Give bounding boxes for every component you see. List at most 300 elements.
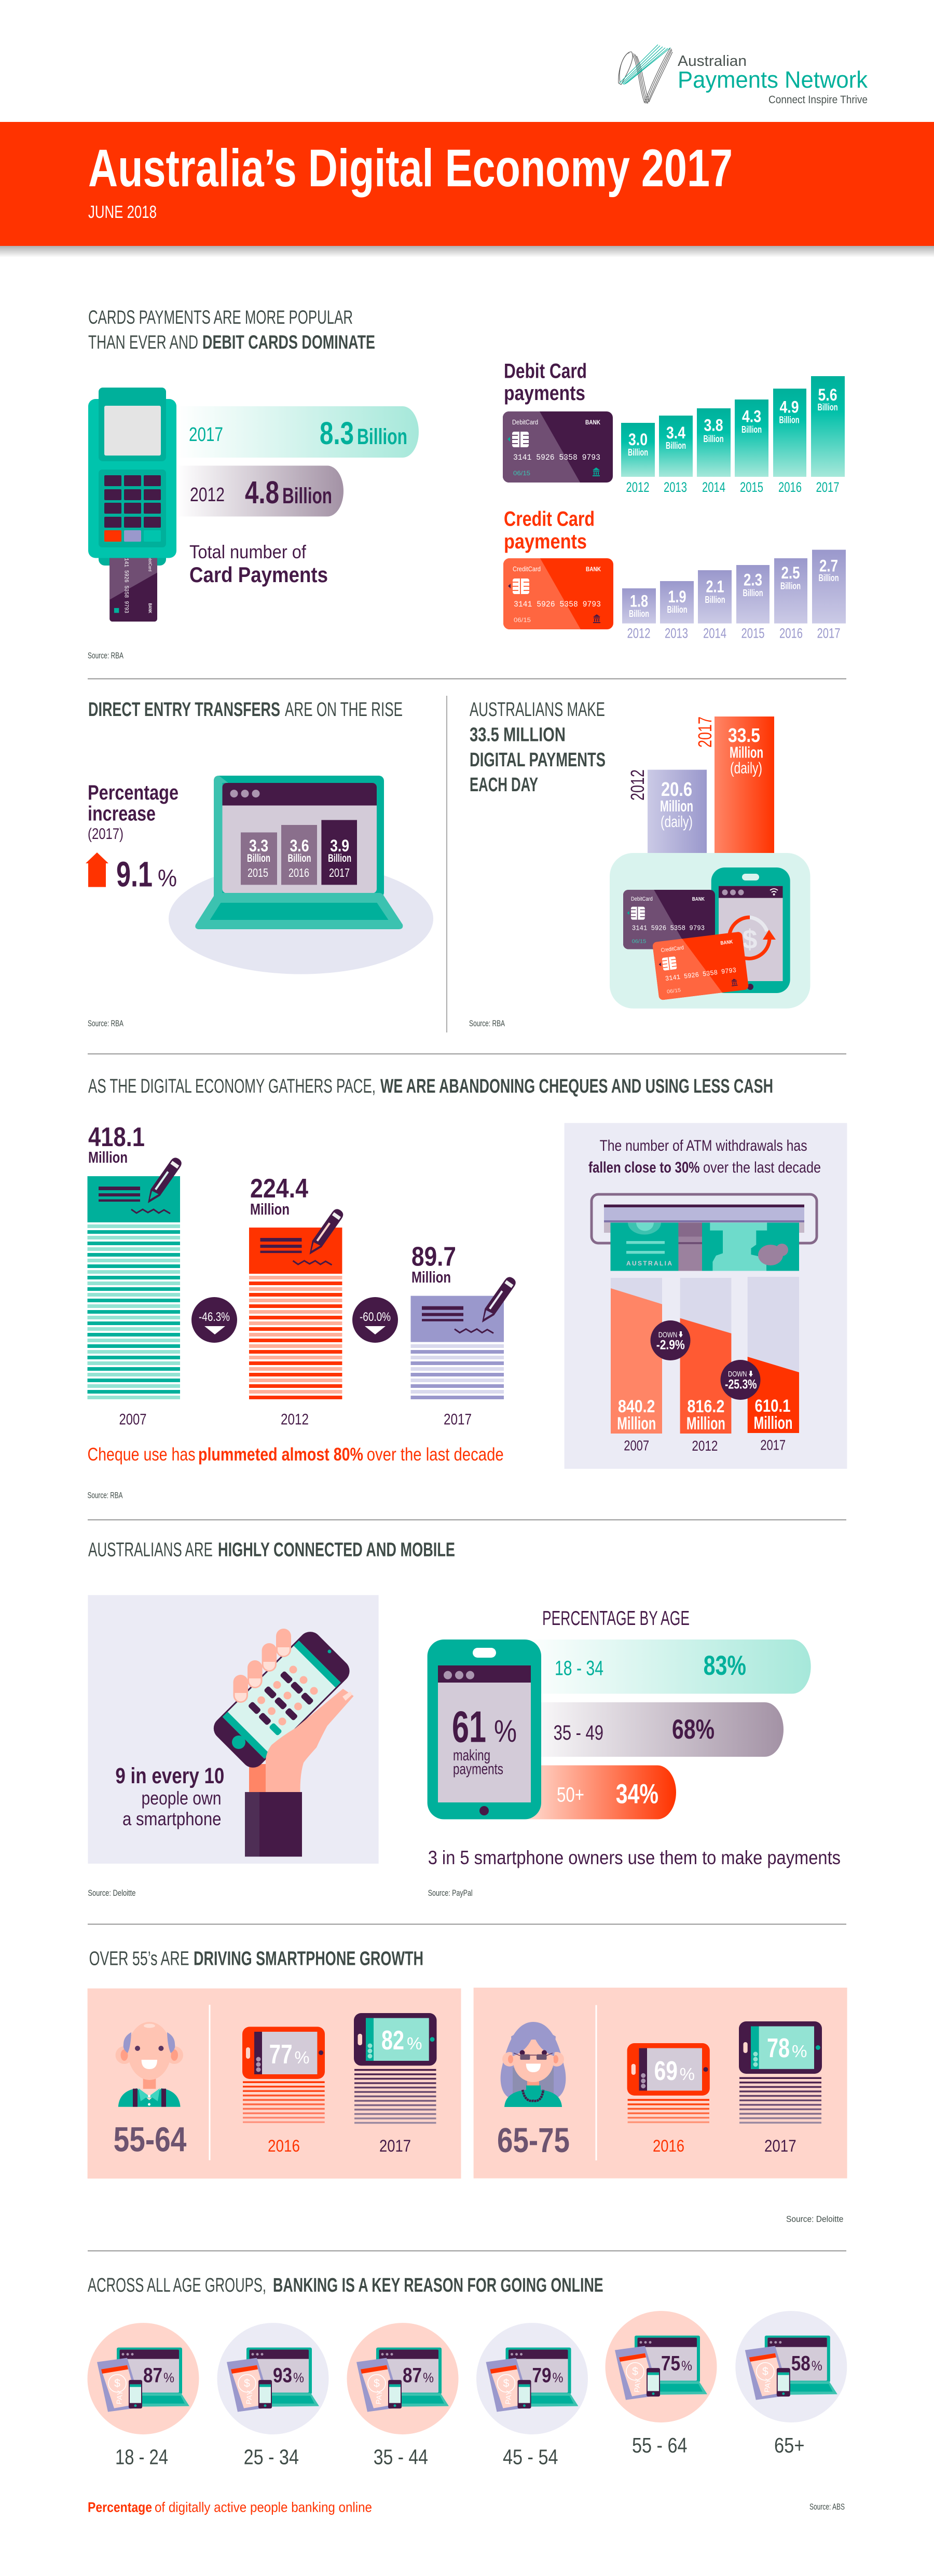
stripes xyxy=(87,1224,180,1399)
heading: digital payments each day xyxy=(470,699,606,796)
icon: pen xyxy=(477,1275,518,1326)
bar: credit 2014 xyxy=(698,570,732,641)
panel: age 55-64 banking xyxy=(605,2311,717,2457)
bar: total card payments 2017 xyxy=(176,406,419,458)
stripes xyxy=(354,2069,436,2124)
source: Source: PayPal xyxy=(428,1888,473,1898)
panel: age 18-24: PAY xyxy=(115,2390,124,2405)
age label: 25 - 34 xyxy=(244,2445,299,2469)
icon: debit card xyxy=(623,890,715,949)
phone: 2016 xyxy=(627,2043,710,2155)
age label: 65+ xyxy=(774,2433,804,2457)
heading: connected and mobile: HIGHLY CONNECTED AND MOBILE xyxy=(218,1539,455,1561)
heading: digital payments each day: DIGITAL PAYMENTS xyxy=(470,749,606,771)
badge: down 2.9 percent: -2.9% xyxy=(656,1338,685,1352)
caption: percentage banking online: of digitally active people banking online xyxy=(155,2499,372,2515)
label: total number of card payments xyxy=(189,541,328,587)
panel: age 55-64 banking: % xyxy=(681,2358,692,2374)
bar: debit 2015 xyxy=(735,400,768,495)
logo mark xyxy=(619,45,672,103)
bar: total card payments 2012: 2012 xyxy=(190,484,225,506)
icon: phone 61 percent: payments xyxy=(453,1761,503,1778)
bar: debit 2013: 2013 xyxy=(664,479,687,495)
bar: debit 2016: Billion xyxy=(779,415,799,425)
panel: age 45-54: PAY xyxy=(504,2390,513,2405)
panel: age 45-54 xyxy=(476,2323,588,2469)
bar chart: debit card payments xyxy=(621,376,845,495)
title: Australia’s Digital Economy 2017 xyxy=(88,139,733,198)
bar: credit 2015: 2.3 xyxy=(744,571,762,589)
text: percentage increase xyxy=(88,781,178,843)
source: Source: RBA xyxy=(88,651,123,660)
phone: 2017: % xyxy=(407,2034,422,2053)
phone: 2016 xyxy=(242,2027,325,2155)
bar: debit 2014: 3.8 xyxy=(704,416,723,435)
age label: 35 - 44 xyxy=(374,2445,428,2469)
icon: credit card xyxy=(503,558,613,629)
bar: total card payments 2012: 4.8 xyxy=(245,475,279,510)
icon: debit card: BANK xyxy=(585,419,600,426)
panel: ATM withdrawals xyxy=(565,1123,847,1469)
panel: age 45-54: 79 xyxy=(532,2364,551,2387)
icon: ATM slot and banknote: AUSTRALIA xyxy=(626,1260,672,1267)
icon: debit card in terminal: BANK xyxy=(147,603,152,613)
source: Source: Deloitte xyxy=(786,2214,843,2224)
callout: smartphone payments: 3 in 5 smartphone owners use them to make payments xyxy=(428,1847,841,1868)
bar: debit 2017: 2017 xyxy=(816,479,840,495)
stat: 9.1 percent: 9.1 xyxy=(116,855,153,894)
logo wordmark: Australian xyxy=(678,53,747,70)
icon: credit card xyxy=(652,931,749,1000)
panel: age 65+: PAY xyxy=(763,2378,772,2393)
text: percentage increase: increase xyxy=(88,802,156,825)
heading: digital payments each day: EACH DAY xyxy=(470,774,538,796)
bar: debit 2016 xyxy=(773,389,806,495)
bar: transfers 2015: Billion xyxy=(247,852,270,864)
bar: daily payments 2017: 33.5 xyxy=(728,725,760,747)
icon: phone 61 percent: 61 xyxy=(452,1703,486,1752)
bar: daily payments 2012: 20.6 xyxy=(661,779,692,801)
bar: transfers 2016: 2016 xyxy=(289,866,309,879)
bar: credit 2013: 1.9 xyxy=(668,587,686,606)
bar: debit 2012 xyxy=(621,423,655,495)
badge: down 2.9 percent xyxy=(651,1320,690,1360)
icon: debit card in terminal xyxy=(109,548,157,622)
icon: debit card: BANK xyxy=(692,897,705,902)
panel: cheque 2012: 224.4 xyxy=(250,1174,308,1204)
icon: phone 61 percent: % xyxy=(494,1714,517,1748)
bar: debit 2013: 3.4 xyxy=(666,423,685,442)
heading: debit card payments xyxy=(504,360,587,405)
stripes xyxy=(411,1344,504,1399)
heading: abandoning cheques: WE ARE ABANDONING CHEQUES AND USING LESS CASH xyxy=(380,1076,773,1097)
panel: cheque 2017 xyxy=(411,1242,518,1428)
panel: age 35-44: $ xyxy=(374,2378,380,2390)
panel: age 18-24: $ xyxy=(114,2378,120,2390)
screen keys xyxy=(257,1665,318,1726)
cuff xyxy=(245,1792,302,1856)
bar: ATM 2007 xyxy=(611,1278,662,1453)
phone: 2016: 77 xyxy=(269,2040,293,2070)
phone body xyxy=(209,1627,354,1772)
bar: debit 2013: Billion xyxy=(666,440,686,451)
panel: age 25-34: 93 xyxy=(273,2364,292,2387)
bar: transfers 2017: Billion xyxy=(328,852,351,864)
bar: ATM 2012: 2012 xyxy=(692,1438,718,1454)
bar: transfers 2017: 3.9 xyxy=(330,836,349,855)
text: 9 in every 10: a smartphone xyxy=(122,1808,221,1829)
bar: credit 2013 xyxy=(660,581,694,641)
panel: cheque 2007: Million xyxy=(88,1148,128,1166)
icon: credit card: BANK xyxy=(586,566,601,573)
text: ATM withdrawals: fallen close to 30% xyxy=(588,1159,699,1176)
bar: daily payments 2017 xyxy=(694,717,774,853)
logo: Payments Network xyxy=(678,66,868,93)
bar: ATM 2017: 2017 xyxy=(760,1437,786,1453)
bar: credit 2017 xyxy=(812,550,846,641)
phone: 2017 xyxy=(739,2021,822,2155)
bar: debit 2016: 2016 xyxy=(778,479,802,495)
text: 9 in every 10: people own xyxy=(141,1787,221,1809)
bar chart: credit card payments xyxy=(622,550,846,641)
panel: age 45-54: % xyxy=(552,2370,564,2386)
bar: daily payments 2012: (daily) xyxy=(661,812,693,831)
heading: abandoning cheques xyxy=(88,1076,773,1097)
phone: 2017: 82 xyxy=(381,2026,404,2056)
panel: age 65+ xyxy=(735,2311,847,2457)
bar: age 18-34 xyxy=(519,1640,811,1693)
badge: minus 60 percent xyxy=(352,1297,398,1343)
bar: credit 2012: 1.8 xyxy=(630,591,648,610)
bar: credit 2017: Billion xyxy=(819,573,839,583)
icon: credit card: 06/15 xyxy=(514,616,531,624)
icon: credit card: 3141 5926 5358 9793 xyxy=(514,600,601,609)
source: Source: Deloitte xyxy=(88,1888,135,1898)
panel: cheque 2007 xyxy=(87,1122,184,1428)
age label: 55 - 64 xyxy=(632,2433,687,2457)
bar: age 18-34: 83% xyxy=(704,1650,746,1681)
bar: debit 2014: Billion xyxy=(704,434,723,444)
icon: debit card: 3141 5926 5358 9793 xyxy=(632,925,705,933)
text: 9 in every 10: 9 in every 10 xyxy=(115,1764,224,1788)
heading: card payments: THAN EVER AND xyxy=(88,332,198,353)
bar: age 35-49 xyxy=(519,1702,784,1757)
panel: age 55-64 banking: $ xyxy=(632,2366,638,2378)
stat: 9.1 percent: % xyxy=(158,864,177,891)
icon: credit card: 3141 5926 5358 9793 xyxy=(665,966,737,983)
header banner xyxy=(0,122,934,257)
bar: transfers 2016: Billion xyxy=(287,852,311,864)
icon: debit card in terminal: DebitCard xyxy=(147,554,153,572)
stripes xyxy=(739,2077,821,2124)
text: ATM withdrawals xyxy=(588,1137,821,1176)
panel: age 35-44: PAY xyxy=(374,2390,383,2405)
logo xyxy=(619,45,868,106)
panel: age 25-34: % xyxy=(293,2370,304,2386)
heading: direct entry transfers: DIRECT ENTRY TRANSFERS xyxy=(88,699,280,721)
bar: debit 2017 xyxy=(811,376,845,495)
date: JUNE 2018 xyxy=(88,202,157,222)
panel: age 55-64 xyxy=(88,1988,461,2179)
phone: 2016: 2016 xyxy=(268,2137,300,2155)
heading: digital payments each day: AUSTRALIANS MAKE xyxy=(470,699,605,721)
heading: abandoning cheques: AS THE DIGITAL ECONOMY GATHERS PACE, xyxy=(88,1076,376,1097)
panel: cheque 2007: 2007 xyxy=(119,1411,146,1428)
bar: transfers 2016: 3.6 xyxy=(290,836,309,855)
bar: daily payments 2017: Million xyxy=(730,743,763,762)
panel: age 18-24: % xyxy=(163,2370,174,2386)
bar: debit 2017: Billion xyxy=(818,402,837,412)
text: ATM withdrawals: The number of ATM withdrawals has xyxy=(600,1137,807,1154)
badge: minus 60 percent: -60.0% xyxy=(360,1310,391,1324)
panel: smartphone ownership xyxy=(88,1595,379,1864)
age label: 18 - 24 xyxy=(115,2445,168,2469)
bar: total card payments 2017: 8.3 xyxy=(320,416,354,451)
heading: connected and mobile xyxy=(88,1539,455,1561)
age label: 65-75 xyxy=(497,2121,570,2160)
panel: age 55-64 banking: PAY xyxy=(633,2378,642,2393)
bar: credit 2014: 2.1 xyxy=(706,577,724,596)
phone: 2016: 2016 xyxy=(653,2137,684,2155)
stripes xyxy=(249,1276,342,1399)
bar: debit 2013 xyxy=(659,416,693,495)
bar: debit 2012: 2012 xyxy=(626,479,650,495)
bar: age 35-49: 35 - 49 xyxy=(554,1721,603,1744)
icon: debit card: 06/15 xyxy=(632,939,647,945)
bar: daily payments 2012: 2012 xyxy=(627,769,648,801)
bar: credit 2014: 2014 xyxy=(703,625,726,641)
bar: credit 2015: Billion xyxy=(743,588,763,598)
icon: phone 61 percent xyxy=(428,1640,541,1819)
bar: credit 2016: 2016 xyxy=(779,625,803,641)
bar: credit 2016 xyxy=(774,558,807,641)
bar: credit 2013: Billion xyxy=(667,604,687,615)
hand xyxy=(266,1689,354,1793)
heading: card payments xyxy=(88,307,375,353)
heading: direct entry transfers: ARE ON THE RISE xyxy=(285,699,403,721)
illustration: phone and cards xyxy=(610,853,811,1009)
icon: older woman xyxy=(501,2022,566,2107)
bar: credit 2013: 2013 xyxy=(665,625,688,641)
icon: phone: $ xyxy=(743,925,758,955)
callout: cheque use xyxy=(87,1444,504,1465)
icon: ATM slot and banknote xyxy=(592,1194,817,1271)
badge: down 25.3 percent xyxy=(720,1360,761,1400)
callout: cheque use: plummeted almost 80% xyxy=(198,1444,363,1465)
heading: banking online: BANKING IS A KEY REASON FOR GOING ONLINE xyxy=(273,2275,603,2296)
icon: up arrow xyxy=(86,852,108,887)
bar: ATM 2017 xyxy=(748,1277,799,1453)
bar: debit 2015: 4.3 xyxy=(742,407,761,425)
bar: credit 2016: Billion xyxy=(780,581,801,591)
bar: age 35-49: 68% xyxy=(672,1714,715,1745)
stripes xyxy=(243,2081,325,2123)
bar: transfers 2017 xyxy=(321,820,357,885)
bar: ATM 2017: Million xyxy=(753,1413,793,1433)
heading: credit card payments: Credit Card xyxy=(504,507,595,530)
phone: 2017: % xyxy=(792,2042,807,2061)
heading: debit card payments: payments xyxy=(504,382,585,405)
badge: minus 46.3 percent: -46.3% xyxy=(199,1310,230,1324)
icon: debit card: 3141 5926 5358 9793 xyxy=(513,453,600,462)
icon: debit card xyxy=(503,411,613,483)
bar: debit 2014 xyxy=(697,408,731,495)
icon: debit card: DebitCard xyxy=(512,418,538,426)
text: percentage increase: Percentage xyxy=(88,781,178,804)
icon: pen xyxy=(143,1155,184,1206)
bar: transfers 2016 xyxy=(281,825,317,885)
badge: down 25.3 percent: -25.3% xyxy=(725,1377,757,1392)
heading: smartphone growth: OVER 55’s ARE xyxy=(89,1948,189,1969)
phone: 2016: % xyxy=(295,2048,309,2067)
phone: 2017: 2017 xyxy=(379,2137,411,2155)
panel: age 18-24 xyxy=(87,2323,199,2469)
bar: ATM 2007: 840.2 xyxy=(618,1397,655,1416)
source: Source: RBA xyxy=(87,1491,123,1500)
panel: age 65+: % xyxy=(812,2358,822,2374)
bar: debit 2012: Billion xyxy=(628,447,648,458)
bar: ATM 2012: 816.2 xyxy=(687,1397,724,1416)
panel: age 65-75 xyxy=(474,1988,847,2179)
callout: cheque use: Cheque use has xyxy=(87,1444,195,1465)
icon: credit card: CreditCard xyxy=(661,945,684,954)
stripes xyxy=(628,2099,709,2123)
panel: age 65+: $ xyxy=(762,2366,768,2378)
bar: age 50+ xyxy=(519,1765,676,1819)
badge: down 25.3 percent: DOWN xyxy=(728,1370,747,1379)
panel: age 35-44: 87 xyxy=(403,2364,422,2387)
phone: 2016: 69 xyxy=(654,2056,678,2086)
panel: credit card payments xyxy=(503,507,846,641)
icon: debit card: 06/15 xyxy=(513,470,530,477)
bar: total card payments 2017: 2017 xyxy=(189,424,223,446)
panel: cheque 2017: 2017 xyxy=(444,1411,472,1428)
bar: daily payments 2017: 2017 xyxy=(694,717,716,748)
icon: phone xyxy=(711,867,790,993)
panel: age 18-24: 87 xyxy=(143,2364,162,2387)
bar: age 50+: 34% xyxy=(616,1779,658,1810)
badge: minus 46.3 percent xyxy=(191,1297,237,1343)
bar: credit 2012: 2012 xyxy=(627,625,651,641)
bar: ATM 2012 xyxy=(680,1278,731,1454)
panel: age 35-44 xyxy=(347,2323,459,2469)
bar: daily payments 2017: (daily) xyxy=(730,759,762,777)
panel: age 25-34: PAY xyxy=(244,2390,254,2405)
caption: percentage banking online: Percentage xyxy=(88,2499,152,2515)
panel: cheque 2012 xyxy=(249,1174,345,1428)
bar: ATM 2007: Million xyxy=(617,1414,656,1434)
bar: debit 2015: Billion xyxy=(741,424,762,435)
bar: debit 2015: 2015 xyxy=(740,479,763,495)
phone: 2016: % xyxy=(680,2064,695,2084)
text: percentage increase: (2017) xyxy=(88,825,123,843)
heading: card payments: DEBIT CARDS DOMINATE xyxy=(202,332,375,353)
panel: age 55-64 banking: 75 xyxy=(661,2352,680,2375)
bar: credit 2017: 2.7 xyxy=(819,557,838,575)
bar: ATM 2012: Million xyxy=(686,1414,725,1434)
bar: total card payments 2012 xyxy=(176,466,344,517)
bar: ATM 2007: 2007 xyxy=(624,1437,649,1453)
text: 9 in every 10 xyxy=(115,1764,224,1829)
bar: transfers 2015: 3.3 xyxy=(249,836,268,855)
bar: credit 2012 xyxy=(622,588,656,641)
callout: cheque use: over the last decade xyxy=(367,1444,504,1465)
bar: credit 2015: 2015 xyxy=(741,625,765,641)
bar: credit 2015 xyxy=(736,565,770,641)
phone: 2017 xyxy=(354,2013,437,2155)
icon: credit card: CreditCard xyxy=(513,565,541,573)
bar: credit 2012: Billion xyxy=(629,609,649,619)
icon: older man xyxy=(115,2022,183,2107)
heading: debit card payments: Debit Card xyxy=(504,360,587,383)
icon: hand holding smartphone xyxy=(209,1627,354,1856)
icon: credit card: 06/15 xyxy=(667,987,681,995)
icon: debit card: DebitCard xyxy=(631,896,653,902)
fingers xyxy=(233,1629,291,1703)
panel: age 45-54: $ xyxy=(503,2378,510,2390)
bar: debit 2017: 5.6 xyxy=(818,385,837,404)
label: total number of card payments: Total number of xyxy=(189,541,307,562)
bar: daily payments 2012: Million xyxy=(660,797,693,815)
panel: cheque 2017: Million xyxy=(411,1268,451,1286)
panel: cheque 2017: 89.7 xyxy=(411,1242,456,1272)
bar: debit 2012: 3.0 xyxy=(628,430,648,449)
bar: transfers 2015 xyxy=(241,832,277,885)
heading: banking online xyxy=(88,2275,603,2296)
source: Source: RBA xyxy=(88,1018,123,1028)
bar: total card payments 2017: Billion xyxy=(357,424,407,449)
bar: transfers 2015: 2015 xyxy=(248,866,268,879)
heading: digital payments each day: 33.5 MILLION xyxy=(470,724,566,746)
icon: phone 61 percent: making xyxy=(453,1747,490,1764)
panel: age 25-34 xyxy=(217,2323,329,2469)
icon: debit card in terminal: 3141 5926 5358 9793 xyxy=(123,555,129,613)
icon: pen xyxy=(305,1207,345,1258)
logo: Connect Inspire Thrive xyxy=(768,94,868,106)
heading: smartphone growth xyxy=(89,1948,423,1969)
bar: credit 2017: 2017 xyxy=(817,625,841,641)
bar: daily payments 2012 xyxy=(627,769,707,853)
age label: 45 - 54 xyxy=(503,2445,558,2469)
bar: transfers 2017: 2017 xyxy=(329,866,350,879)
icon: credit card: BANK xyxy=(720,939,733,946)
bar: ATM 2017: 610.1 xyxy=(754,1396,791,1416)
phone: 2017: 2017 xyxy=(764,2137,796,2155)
panel: age 65+: 58 xyxy=(791,2352,811,2375)
panel: cheque 2012: 2012 xyxy=(281,1411,309,1428)
phone: 2017: 78 xyxy=(767,2033,790,2063)
source: Source: ABS xyxy=(809,2502,845,2512)
heading: card payments: CARDS PAYMENTS ARE MORE POPULAR xyxy=(88,307,353,328)
text: ATM withdrawals: over the last decade xyxy=(703,1159,821,1176)
panel: cheque 2012: Million xyxy=(250,1200,290,1218)
bar: debit 2016: 4.9 xyxy=(779,397,799,416)
heading: banking online: ACROSS ALL AGE GROUPS, xyxy=(88,2275,266,2296)
bar: credit 2016: 2.5 xyxy=(781,563,800,582)
bar: age 50+: 50+ xyxy=(557,1784,584,1807)
heading: connected and mobile: AUSTRALIANS ARE xyxy=(88,1539,213,1561)
source: Source: RBA xyxy=(469,1018,505,1028)
bar: credit 2014: Billion xyxy=(705,595,725,605)
icon: payment terminal xyxy=(88,388,176,622)
heading: credit card payments: payments xyxy=(504,530,587,553)
panel: cheque 2007: 418.1 xyxy=(88,1122,145,1152)
bar: debit 2014: 2014 xyxy=(702,479,725,495)
panel: age 35-44: % xyxy=(423,2370,434,2386)
icon: laptop with bar chart xyxy=(169,776,433,974)
bar: total card payments 2012: Billion xyxy=(282,484,332,508)
badge: down 2.9 percent: DOWN xyxy=(658,1330,677,1339)
